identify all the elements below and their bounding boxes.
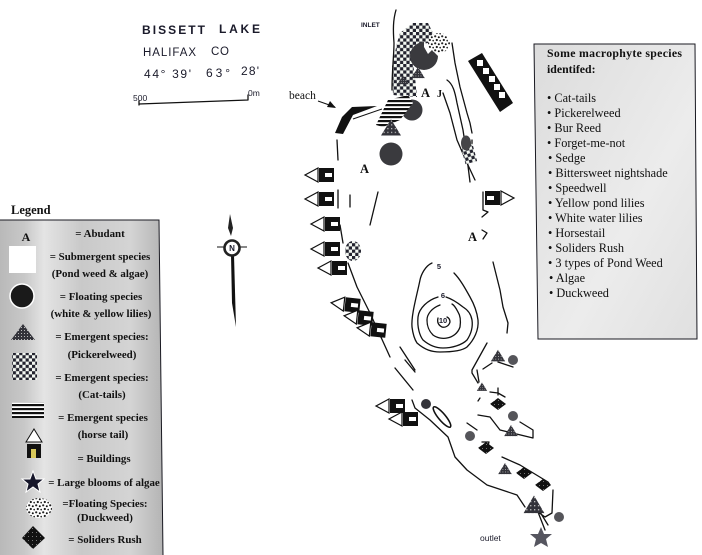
species list: • White water lilies xyxy=(548,211,643,225)
legend labels: = Emergent species xyxy=(58,412,148,424)
title: Bissett Lake: BISSETT xyxy=(142,23,206,37)
legend labels xyxy=(48,228,160,546)
legend labels: = Large blooms of algae xyxy=(48,477,160,489)
species list: • Cat-tails xyxy=(547,91,596,105)
soldiers rush diamonds xyxy=(478,398,551,491)
species list: • Horsestail xyxy=(548,226,606,240)
panel: macrophyte species list xyxy=(534,44,697,339)
list heading: Some macrophyte species xyxy=(547,46,682,60)
abundant markers: J xyxy=(437,89,442,100)
icon: abundant A: A xyxy=(22,230,31,244)
species list: • Speedwell xyxy=(548,181,607,195)
species list xyxy=(547,91,668,300)
algae bloom star xyxy=(530,527,552,547)
abundant markers: A xyxy=(468,230,477,244)
depth labels: 5 xyxy=(437,262,441,271)
icon: north compass xyxy=(217,214,247,327)
legend labels: (Duckweed) xyxy=(77,512,133,524)
narrow island xyxy=(431,405,453,429)
legend heading: Legend xyxy=(11,203,51,217)
shoreline and channels xyxy=(337,10,553,530)
horse tail patch xyxy=(376,95,413,127)
abundant markers: A xyxy=(360,162,369,176)
panel: legend xyxy=(0,220,163,555)
beach label and arrow: beach xyxy=(289,90,316,102)
legend labels: = Emergent species: xyxy=(55,372,149,384)
species list: • Pickerelweed xyxy=(547,106,621,120)
legend labels: =Floating Species: xyxy=(62,498,148,510)
scale bar xyxy=(133,88,260,105)
abundant markers xyxy=(360,86,477,244)
depth labels: 6 xyxy=(441,291,445,300)
icon: pickerelweed triangle xyxy=(11,324,35,340)
species list: • Algae xyxy=(549,271,586,285)
contours: depth xyxy=(412,263,478,352)
icon: algae star xyxy=(22,471,44,492)
map: Bissett Lake xyxy=(289,10,564,547)
species list: • Soliders Rush xyxy=(548,241,624,255)
location: Halifax Co: CO xyxy=(211,46,229,58)
icon: duckweed xyxy=(26,498,52,518)
coordinates: 63° xyxy=(206,66,230,80)
abundant markers: A xyxy=(421,86,430,100)
legend labels: (horse tail) xyxy=(78,429,129,441)
legend labels: = Submergent species xyxy=(50,251,150,263)
list heading: identifed: xyxy=(547,62,596,76)
legend labels: (Pond weed & algae) xyxy=(52,268,149,280)
west shore buildings xyxy=(305,168,418,426)
floating lilies upper xyxy=(410,42,438,70)
cat-tails upper zone xyxy=(392,23,433,97)
species list: • Bittersweet nightshade xyxy=(548,166,668,180)
legend labels: = Floating species xyxy=(60,291,142,303)
species list: • Forget-me-not xyxy=(547,136,626,150)
icon: submergent white square xyxy=(9,246,36,273)
species list: • Duckweed xyxy=(549,286,609,300)
pickerelweed middle xyxy=(381,119,401,136)
duckweed patch xyxy=(428,33,450,53)
icon: floating circle xyxy=(10,284,34,308)
list heading xyxy=(547,46,682,76)
coordinates: 44° 39' xyxy=(144,67,191,81)
icon: cat-tails checker xyxy=(12,353,37,380)
scale bar: 0m xyxy=(248,88,260,98)
legend labels: = Soliders Rush xyxy=(68,534,142,546)
icon: soldiers rush diamond xyxy=(22,526,45,549)
icon: building xyxy=(26,429,42,458)
east channel lily and cat-tails xyxy=(461,136,477,164)
legend labels: = Emergent species: xyxy=(55,331,149,343)
outlet label: outlet xyxy=(480,533,501,543)
depth labels xyxy=(437,262,447,325)
building strip xyxy=(468,53,513,112)
cat-tails small patch xyxy=(345,241,361,261)
icon: north compass: N xyxy=(229,244,235,253)
inlet label: INLET xyxy=(361,22,380,29)
species list: • Sedge xyxy=(548,151,586,165)
legend labels: (white & yellow lilies) xyxy=(51,308,152,320)
depth labels: 10 xyxy=(439,316,447,325)
beach xyxy=(335,106,377,134)
floating lilies middle xyxy=(402,100,422,120)
icon: horse tail lines xyxy=(12,402,44,418)
lower floating lilies xyxy=(421,355,564,522)
legend labels: = Buildings xyxy=(77,453,131,465)
pickerelweed upper xyxy=(397,67,425,84)
floating lilies lower xyxy=(380,142,402,166)
legend labels: = Abudant xyxy=(75,228,125,240)
lower pickerelweed xyxy=(477,350,544,513)
legend labels: (Pickerelweed) xyxy=(68,349,137,361)
east shore building xyxy=(485,191,514,205)
scale bar: 500 xyxy=(133,93,147,103)
location: Halifax Co: HALIFAX xyxy=(143,47,196,59)
title block xyxy=(142,22,260,81)
coordinates: 28' xyxy=(241,64,259,78)
species list: • Bur Reed xyxy=(547,121,601,135)
species list: • Yellow pond lilies xyxy=(548,196,645,210)
species list: • 3 types of Pond Weed xyxy=(548,256,663,270)
title: Bissett Lake: LAKE xyxy=(219,22,260,36)
legend labels: (Cat-tails) xyxy=(78,389,126,401)
beach label and arrow xyxy=(289,90,336,108)
